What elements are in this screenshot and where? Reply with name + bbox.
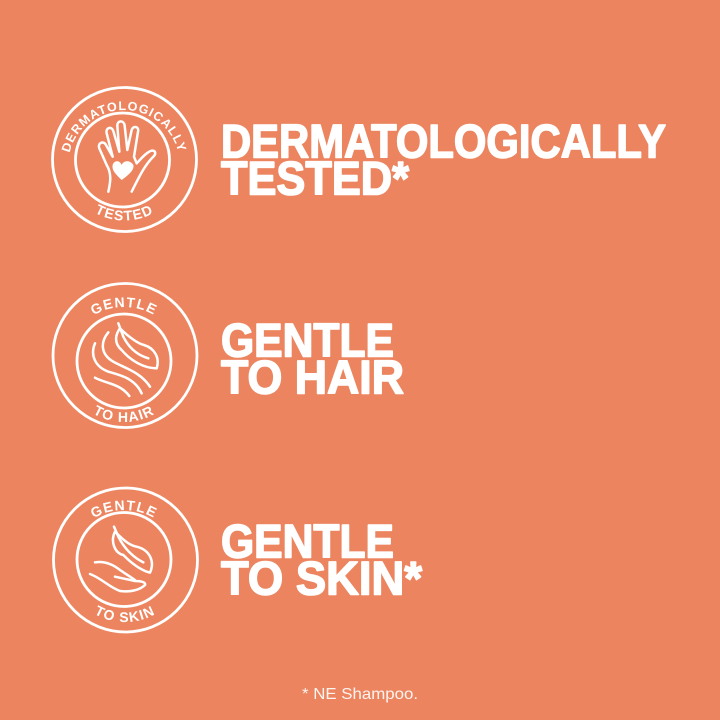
heading: gentle to hair: TO HAIR	[221, 350, 404, 403]
heading: gentle to hair	[221, 313, 404, 403]
footnote: * NE Shampoo.	[302, 686, 418, 703]
icon: leaf and hair strands	[93, 323, 158, 396]
badge: dermatologically tested: TESTED	[98, 204, 152, 220]
badge: gentle to skin: GENTLE	[91, 500, 157, 518]
badge: gentle to skin	[52, 486, 199, 634]
heading: gentle to skin: GENTLE	[221, 514, 394, 567]
badge: dermatologically tested: DERMATOLOGICALLY	[62, 102, 186, 152]
badge: gentle to skin: TO SKIN	[96, 605, 154, 622]
badge: dermatologically tested	[51, 86, 198, 233]
badge: gentle to hair: TO HAIR	[96, 405, 154, 422]
heading: dermatologically tested: TESTED*	[221, 151, 410, 204]
icon: hand with heart	[99, 121, 155, 192]
heading: gentle to skin: TO SKIN*	[221, 551, 423, 604]
heading: dermatologically tested	[221, 114, 666, 204]
badge: gentle to hair	[52, 282, 198, 429]
heading: gentle to hair: GENTLE	[221, 313, 394, 366]
heading: dermatologically tested: DERMATOLOGICALLY	[221, 114, 666, 167]
icon: leaf above open hand	[90, 527, 152, 591]
badge: gentle to hair: GENTLE	[91, 297, 157, 314]
heading: gentle to skin	[221, 514, 423, 604]
